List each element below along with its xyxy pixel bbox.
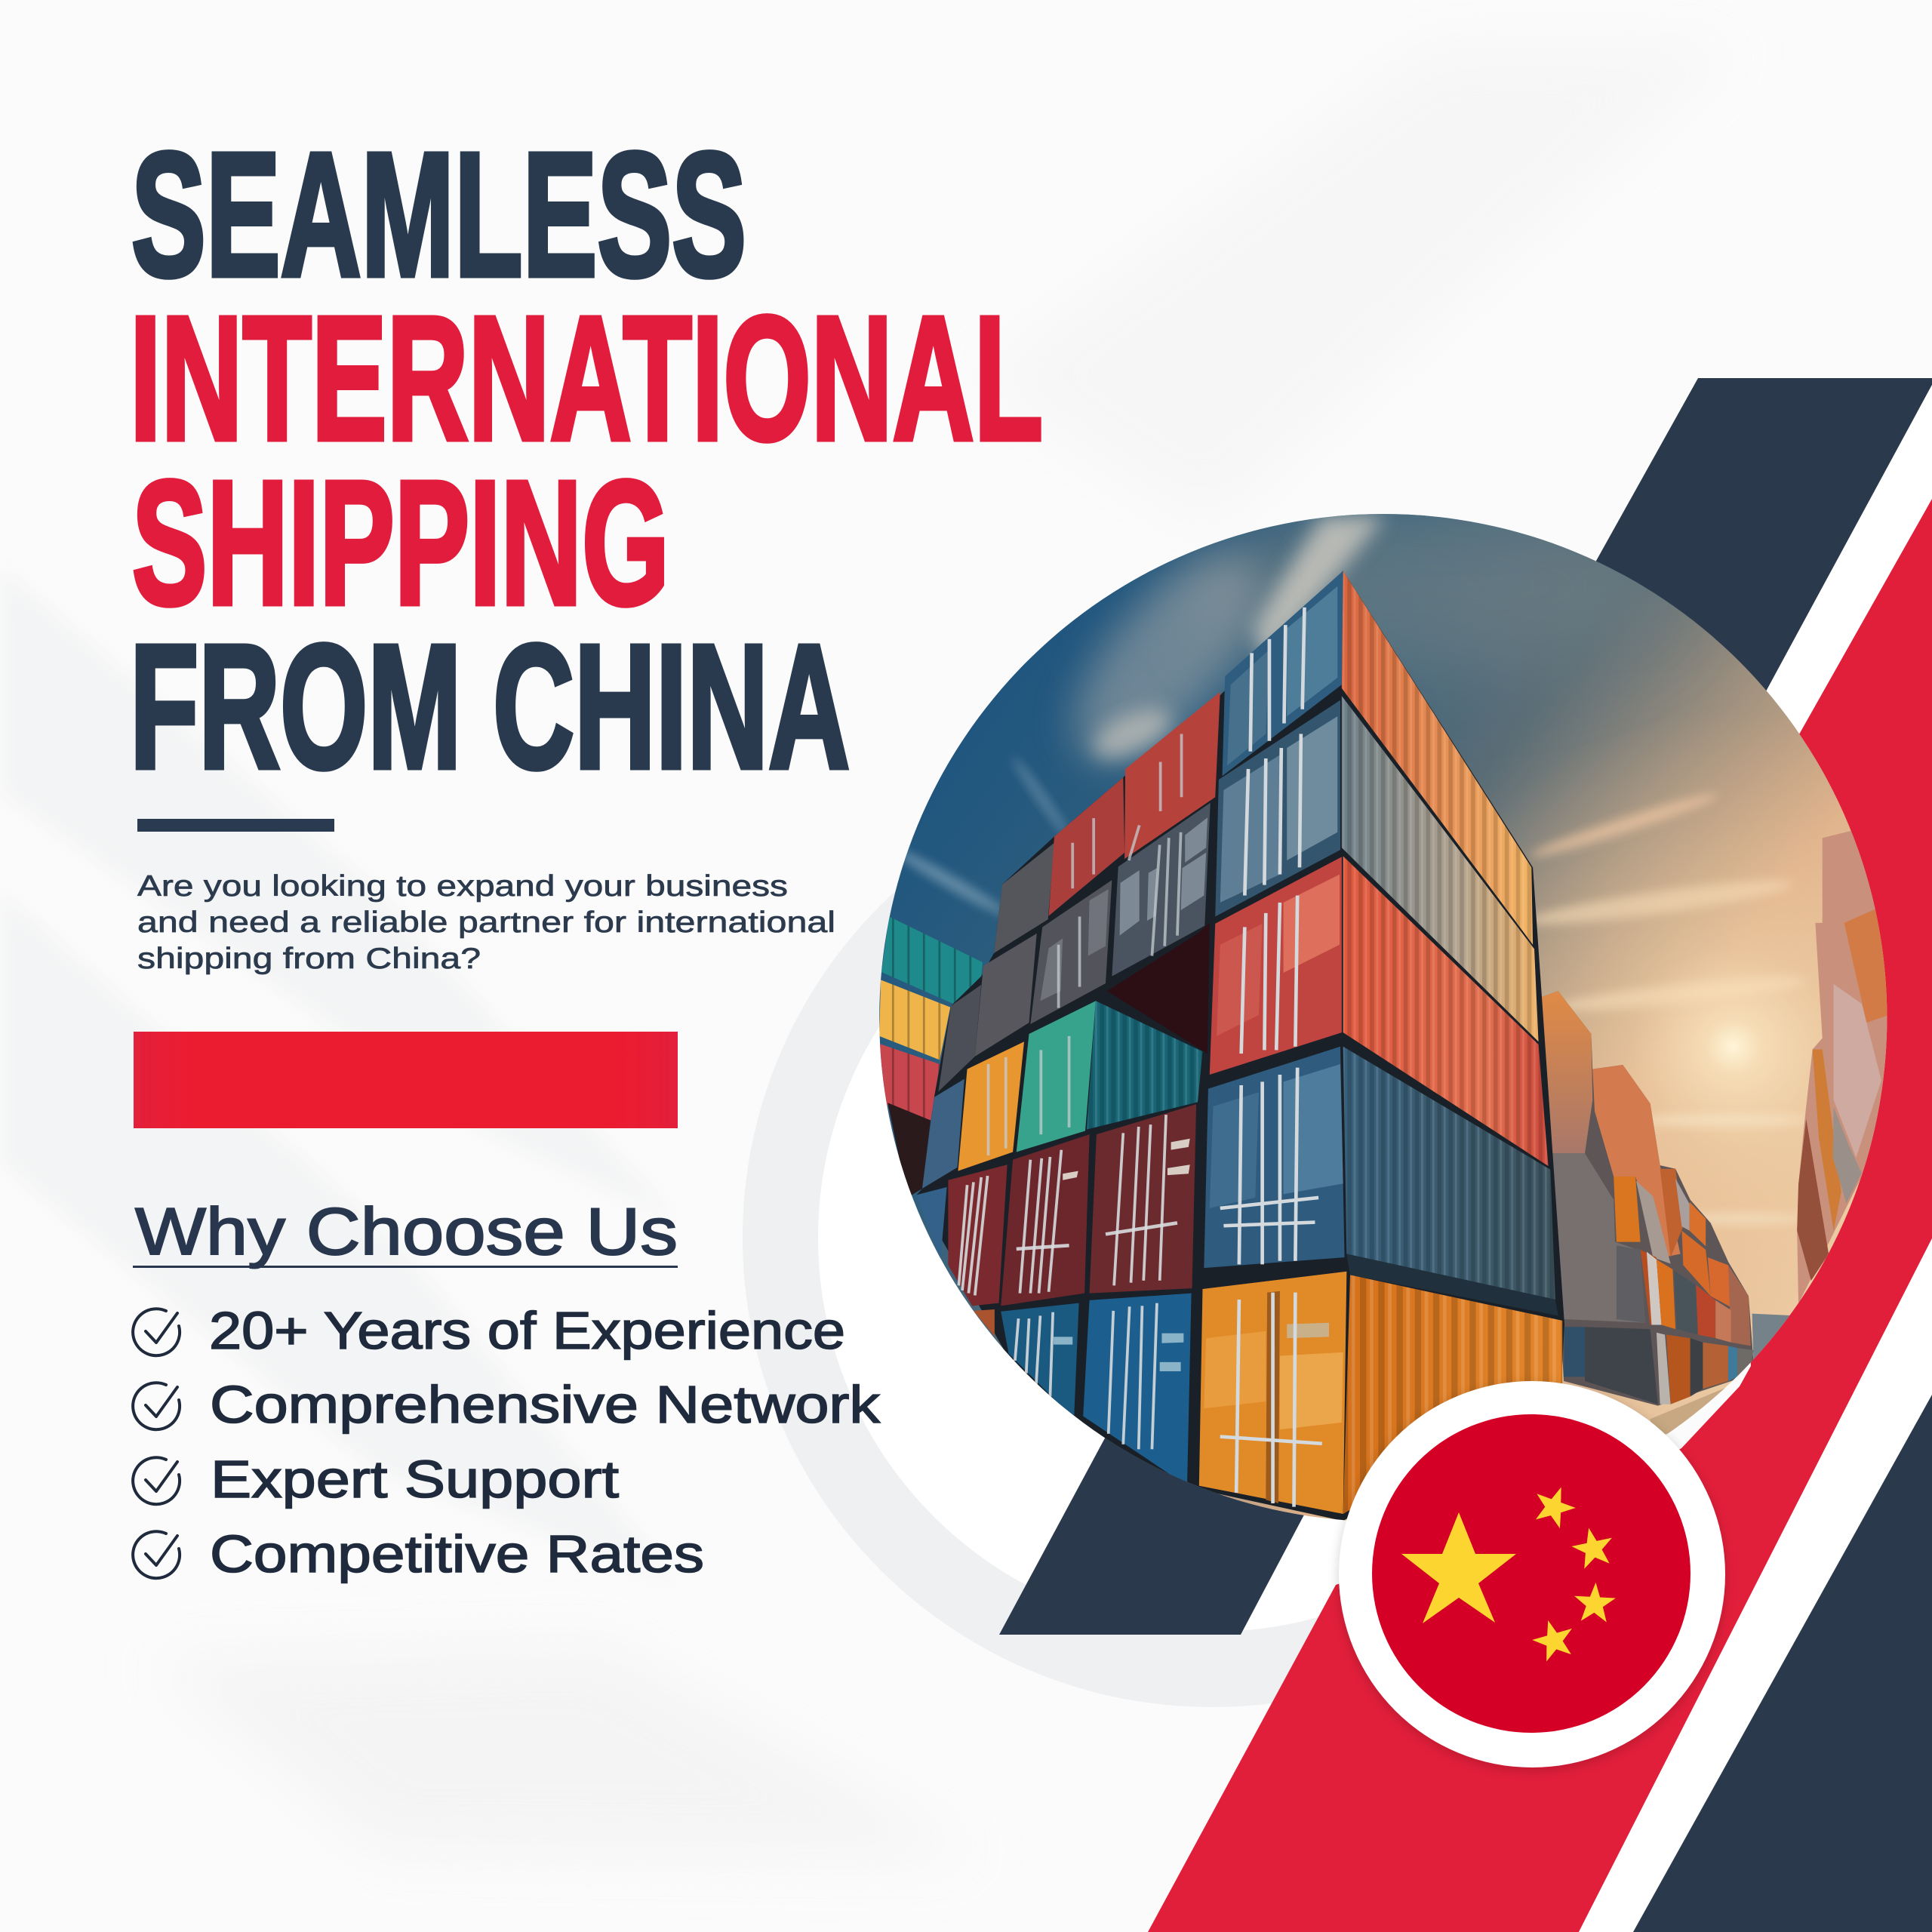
item: experience: 20+ Years of Experience xyxy=(209,1301,845,1360)
flag disc xyxy=(1372,1414,1690,1733)
main container tower: side faces xyxy=(1342,571,1562,1514)
intro paragraph xyxy=(137,870,835,975)
diagonal band: red xyxy=(1148,499,1932,1932)
left teal, yellow, red containers xyxy=(879,917,983,1198)
small star 2 xyxy=(1568,1524,1617,1571)
title xyxy=(130,115,1043,805)
title line 1: SEAMLESS xyxy=(131,115,746,313)
intro paragraph: and need a reliable partner for international xyxy=(137,906,835,939)
diagonal band: white stripe top xyxy=(1736,385,1932,747)
title line 2: INTERNATIONAL xyxy=(130,279,1043,477)
white ring xyxy=(1339,1381,1725,1767)
title line 4: FROM CHINA xyxy=(130,608,850,805)
photo: stacked shipping containers at sunset xyxy=(872,495,1932,1528)
item: network: Comprehensive Network xyxy=(210,1375,881,1434)
heading: why choose us: Why Choose Us xyxy=(135,1194,678,1269)
decorative ring behind photo xyxy=(780,806,1644,1669)
title line 3: SHIPPING xyxy=(132,444,669,641)
large star xyxy=(1401,1512,1516,1623)
small star 3 xyxy=(1573,1581,1617,1623)
intro paragraph: Are you looking to expand your business xyxy=(137,870,788,903)
left container columns xyxy=(917,692,1220,1486)
title rule xyxy=(137,819,334,832)
small star 4 xyxy=(1528,1614,1579,1663)
flag badge xyxy=(1337,1381,1727,1772)
stack silhouette xyxy=(917,571,1564,1521)
distant skyline xyxy=(1752,1313,1790,1360)
diagonal band: navy under photo xyxy=(999,1374,1351,1635)
red call-to-action bar xyxy=(134,1032,678,1128)
distant container row xyxy=(1540,991,1753,1406)
list: reasons xyxy=(133,1301,881,1583)
far right container stack xyxy=(1797,831,1887,1303)
ground xyxy=(1650,1388,1725,1434)
diagonal band: bottom navy xyxy=(1633,1395,1932,1932)
intro paragraph: shipping from China? xyxy=(137,943,481,975)
main container tower: front faces xyxy=(1199,571,1346,1514)
diagonal band: top navy xyxy=(1585,378,1932,747)
small star 1 xyxy=(1528,1480,1580,1531)
item: support: Expert Support xyxy=(211,1450,619,1509)
diagonal band: white stripe bottom xyxy=(1579,1238,1932,1932)
item: rates: Competitive Rates xyxy=(210,1524,704,1583)
